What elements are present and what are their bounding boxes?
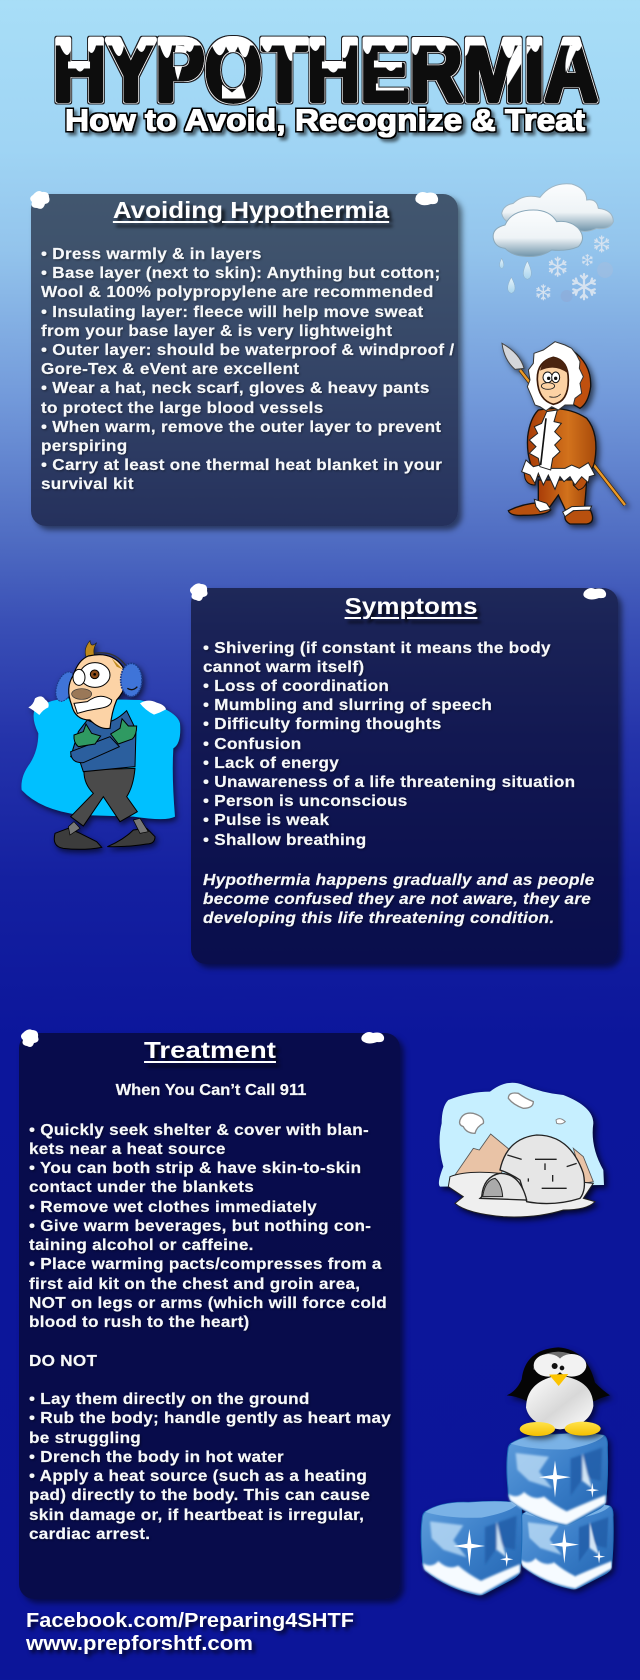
- icon: snow corner left: [21, 1029, 38, 1047]
- icon: snow corner right: [583, 588, 606, 600]
- title: HYPOTHERMIA: [53, 22, 598, 120]
- panel: symptoms: [190, 583, 626, 972]
- panel: treatment: [19, 1029, 408, 1606]
- panel background: [19, 1033, 400, 1599]
- mittens: [524, 472, 588, 490]
- body: [527, 409, 596, 477]
- clouds: [460, 1113, 484, 1133]
- gloves: [74, 724, 101, 747]
- footer links: [25, 1609, 358, 1660]
- hood fur: [527, 342, 583, 411]
- face: [537, 357, 568, 404]
- icon: igloo: [438, 1082, 610, 1224]
- shoes: [54, 828, 102, 849]
- italic note: Hypothermia happens gradually and as people become confused they are not aware, they are developing this life threatening condition.: [203, 872, 595, 927]
- heading: Treatment: [144, 1037, 276, 1063]
- panel background: [191, 588, 618, 964]
- nose: [72, 689, 92, 699]
- earmuff right: [121, 663, 142, 697]
- legs and boots: [538, 480, 587, 513]
- icon: snow corner left: [190, 583, 208, 601]
- panel background: [31, 194, 458, 526]
- footer links: Facebook.com/Preparing4SHTF: [26, 1609, 354, 1632]
- headband: [95, 653, 127, 667]
- icon: inuit figure: [501, 340, 632, 532]
- heading: Avoiding Hypothermia: [113, 197, 389, 223]
- hair: [85, 641, 97, 657]
- icon: snow corner right: [361, 1032, 384, 1044]
- icon: snow corner left: [30, 191, 50, 209]
- text block: • Quickly seek shelter & cover with blan- kets near a heat source • You can both strip & have skin-to-skin contact under the blankets • Remove wet clothes immediately • Give warm beverages, but nothing con- taining alcohol or caffeine. • Place warming pacts/compresses from a first aid kit on the chest and groin area, NOT on legs or arms (which will force cold blood to rush to the heart) DO NOT • Lay them directly on the ground • Rub the body; handle gently as heart may be struggling • Drench the body in hot water • Apply a heat source (such as a heating pad) directly to the body. This can cause skin damage or, if heartbeat is irregular, cardiac arrest.: [29, 1122, 391, 1543]
- jacket: [71, 711, 136, 772]
- icon: snow corner right: [415, 192, 438, 206]
- heading: Symptoms: [345, 593, 477, 619]
- icon: penguin: [506, 1347, 614, 1444]
- bottom fur hem: [522, 460, 595, 489]
- icon: cloud with rain and snow: [492, 183, 614, 302]
- sky: [439, 1083, 604, 1187]
- mouth: [74, 696, 112, 713]
- icon: ice cubes: [420, 1433, 620, 1602]
- footer links: www.prepforshtf.com: [25, 1632, 253, 1655]
- legs: [71, 768, 137, 826]
- text block: • Dress warmly & in layers • Base layer (next to skin): Anything but cotton; Wool & 100% polypropylene are recommended • Insulating layer: fleece will help move sweat from your base layer & is very lightweight • Outer layer: should be waterproof & windproof / Gore-Tex & eVent are excellent • Wear a hat, neck scarf, gloves & heavy pants to protect the large blood vessels • When warm, remove the outer layer to prevent perspiring • Carry at least one thermal heat blanket in your survival kit: [41, 246, 454, 493]
- icon: shivering man: [20, 640, 186, 856]
- sub-heading: When You Can’t Call 911: [116, 1082, 306, 1099]
- cyan backdrop: [21, 698, 180, 819]
- dome: [500, 1135, 584, 1204]
- text block: • Shivering (if constant it means the body cannot warm itself) • Loss of coordination • Mumbling and slurring of speech • Difficulty forming thoughts • Confusion • Lack of energy • Unawareness of a life threatening situation • Person is unconscious • Pulse is weak • Shallow breathing: [203, 640, 575, 849]
- head: [69, 655, 126, 729]
- ground: [448, 1172, 595, 1217]
- earmuff left: [52, 670, 78, 704]
- spear: [502, 343, 625, 505]
- chest fur: [529, 410, 561, 470]
- subtitle: How to Avoid, Recognize & Treat: [65, 102, 585, 138]
- panel: avoiding hypothermia: [30, 191, 466, 534]
- hood: [553, 350, 591, 408]
- eye: [80, 663, 110, 687]
- entrance: [480, 1173, 527, 1200]
- mountains: [455, 1134, 510, 1177]
